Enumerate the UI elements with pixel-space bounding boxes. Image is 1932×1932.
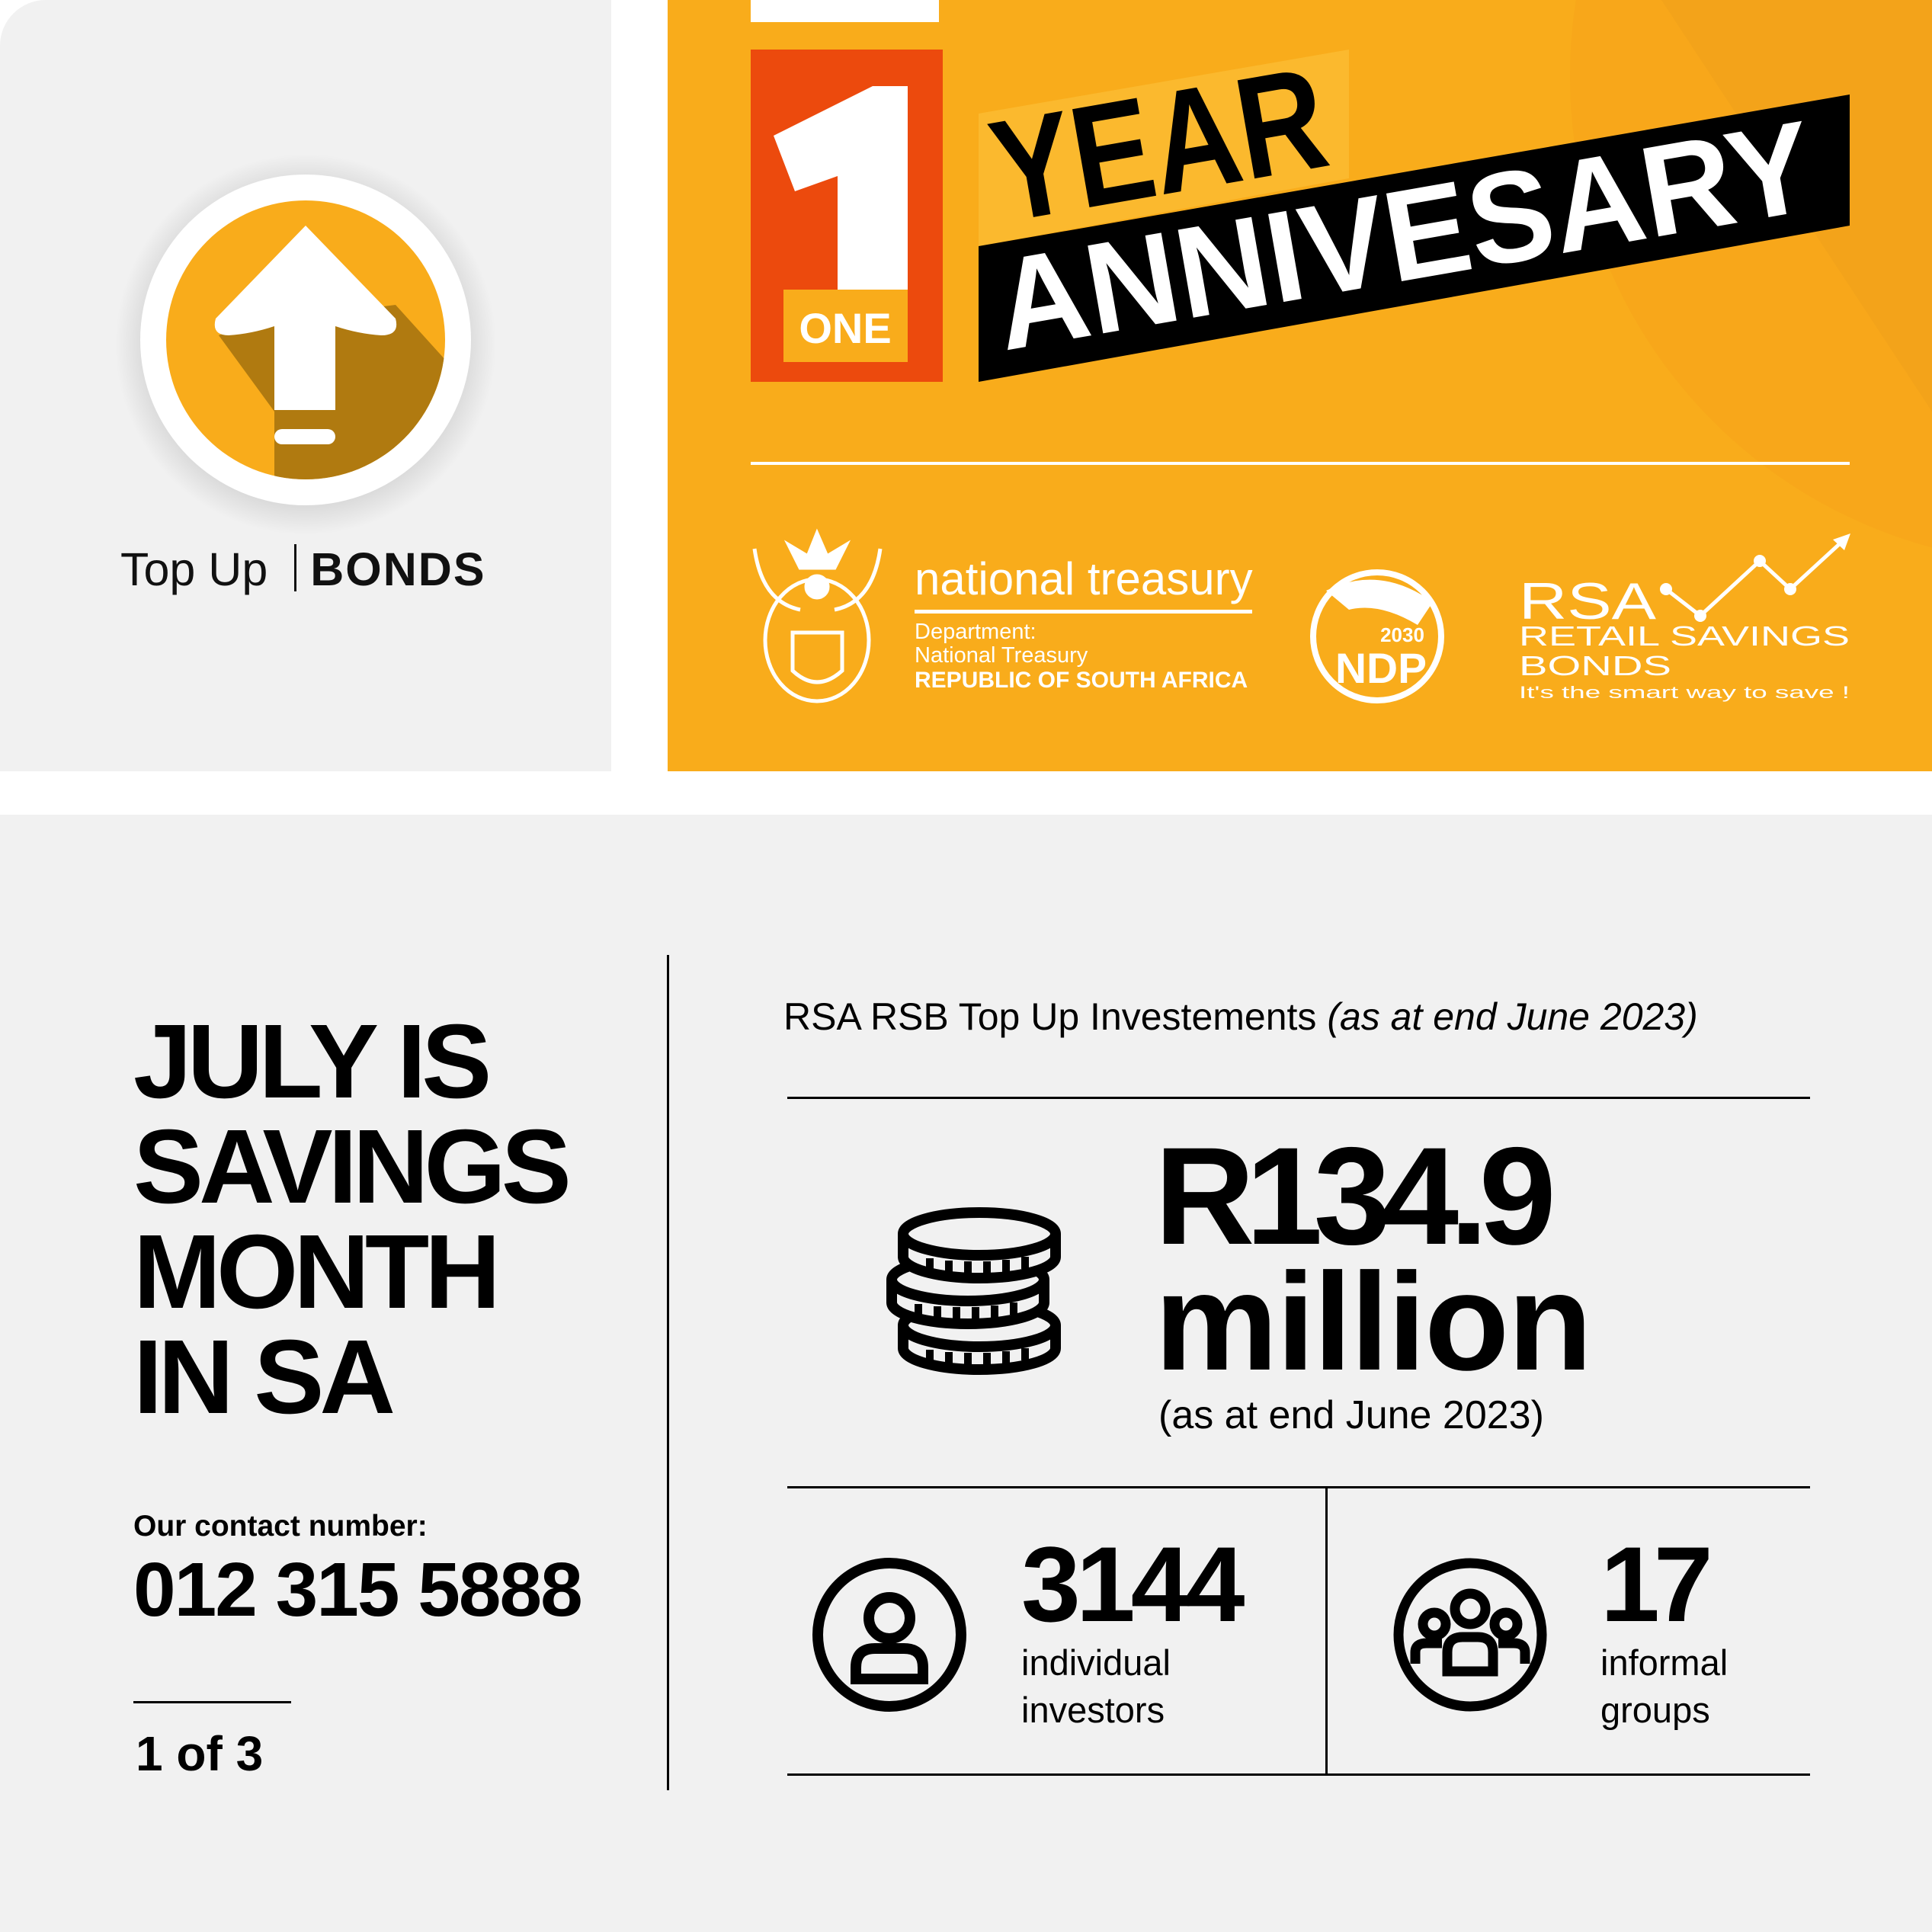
page number: 1 of 3 (136, 1726, 263, 1781)
stat: 17 informal groups: 17 (1600, 1524, 1707, 1644)
year anniversary banner: YEAR (980, 37, 1338, 253)
logo: RSA retail savings bonds: BONDS (1519, 650, 1671, 681)
year anniversary banner: ANNIVESARY (985, 94, 1824, 378)
white top bar (751, 0, 939, 22)
icon: person (812, 1558, 966, 1712)
stat: 3144 individual investors: 3144 (1021, 1524, 1240, 1644)
panel: top-left gray (0, 0, 611, 771)
subtitle: RSA RSB Top Up Investements (as at end June 2023) (783, 995, 1698, 1038)
icon: coins (886, 1207, 1061, 1375)
stat: 3144 individual investors: individual (1021, 1642, 1171, 1683)
panel: bottom gray (0, 815, 1932, 1932)
heading: July is savings month: MONTH (133, 1213, 496, 1331)
logo: RSA retail savings bonds: It's the smart way to save ! (1519, 683, 1850, 702)
heading: July is savings month (133, 1003, 567, 1436)
logo: NDP 2030: 2030 (1380, 623, 1424, 646)
stat: R134.9 million (1155, 1118, 1591, 1437)
logo text: national treasury: National Treasury (915, 643, 1088, 668)
stat: R134.9 million: (as at end June 2023) (1158, 1393, 1544, 1437)
stat: 3144 individual investors (1021, 1524, 1245, 1730)
contact: 012 315 5888 (133, 1547, 582, 1632)
logo text: national treasury: national treasury (915, 553, 1253, 604)
logo: RSA retail savings bonds: RETAIL SAVINGS (1519, 620, 1850, 652)
stat: 17 informal groups (1600, 1524, 1728, 1730)
logo text: national treasury: Department: (915, 620, 1036, 644)
stat: R134.9 million: R134.9 (1155, 1118, 1547, 1274)
panel: orange header (668, 0, 1932, 771)
icon: up arrow circle (127, 165, 485, 524)
icon: group (1393, 1558, 1547, 1712)
heading: July is savings month: JULY IS (133, 1003, 487, 1120)
logo: coat of arms (755, 533, 880, 701)
contact: Our contact number: (133, 1510, 428, 1543)
heading: July is savings month: IN SA (133, 1318, 391, 1436)
heading: July is savings month: SAVINGS (133, 1108, 567, 1226)
contact (133, 1510, 582, 1632)
stat: 3144 individual investors: investors (1021, 1690, 1165, 1730)
stat: 17 informal groups: informal (1600, 1642, 1728, 1683)
logo: RSA retail savings bonds: RSA (1519, 572, 1657, 630)
logo text: national treasury (915, 553, 1253, 693)
logo: NDP 2030: NDP (1335, 644, 1427, 692)
red box with 1: ONE (799, 304, 892, 352)
stat: 17 informal groups: groups (1600, 1690, 1710, 1730)
logo: NDP 2030 (1313, 572, 1441, 700)
logo text: national treasury: REPUBLIC OF SOUTH AFRICA (915, 668, 1248, 693)
text: Top Up | BONDS: Top Up BONDS (120, 543, 486, 595)
red box with 1 (751, 50, 943, 382)
stat: R134.9 million: million (1155, 1244, 1591, 1399)
logo: RSA retail savings bonds (1519, 533, 1850, 702)
